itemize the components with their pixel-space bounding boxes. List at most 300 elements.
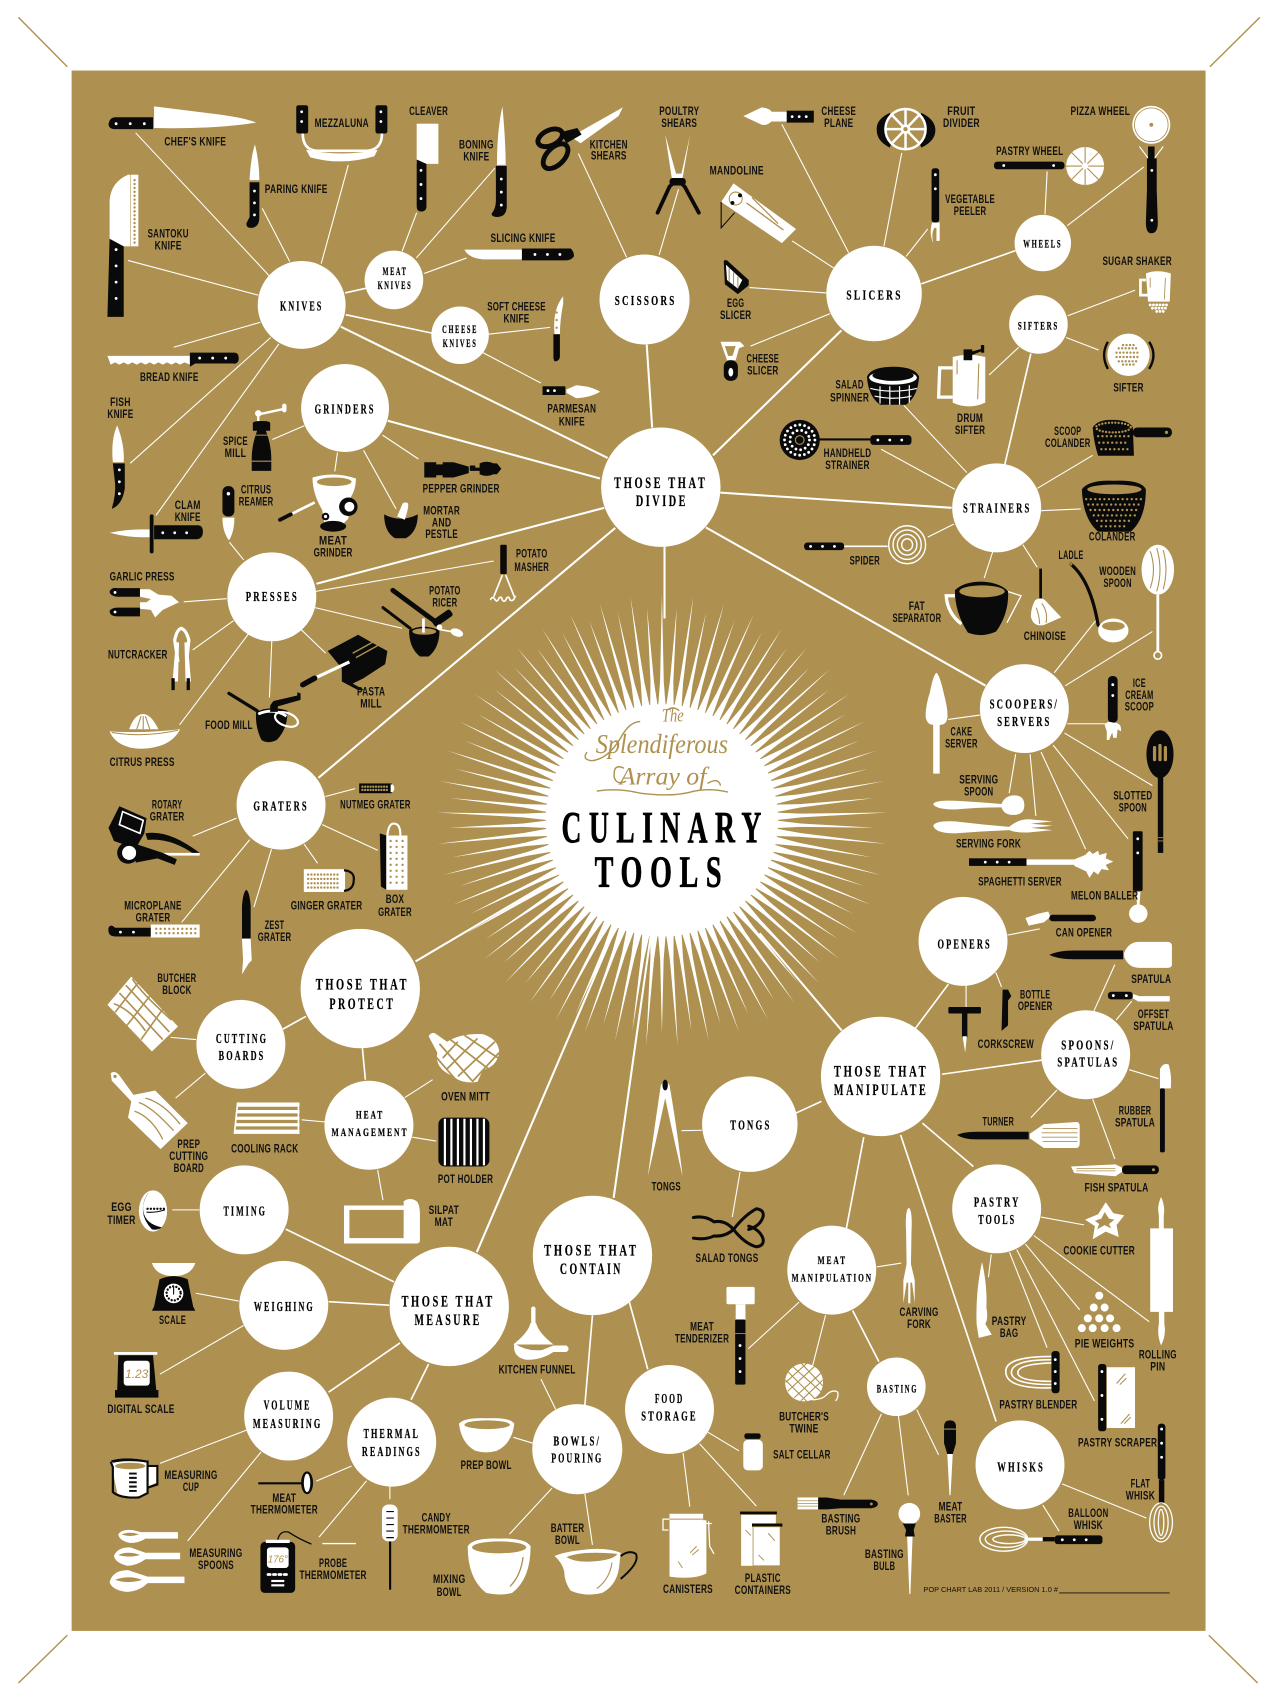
tool: wooden spoon: SPOON — [1104, 577, 1132, 590]
tool: handheld strainer: HANDHELD — [824, 447, 871, 460]
tool: parmesan knife: KNIFE — [559, 415, 585, 428]
tool: pot holder — [438, 1118, 493, 1186]
hub: meat manipulation — [787, 1226, 876, 1315]
tool: scoop colander — [1045, 420, 1172, 456]
tool: citrus reamer: CITRUS — [241, 484, 271, 497]
hub: heat management: MANAGEMENT — [332, 1127, 409, 1139]
tool: turner: TURNER — [983, 1115, 1014, 1128]
tool: rotary grater: ROTARY — [152, 798, 182, 811]
tool: melon baller — [1071, 831, 1147, 923]
tool: cake server: CAKE — [951, 726, 972, 739]
tool: meat thermometer: THERMOMETER — [251, 1504, 318, 1517]
hub: those that measure: MEASURE — [415, 1312, 482, 1329]
hub: basting: BASTING — [877, 1384, 918, 1396]
hub: thermal readings: READINGS — [362, 1444, 422, 1459]
tool: turner — [957, 1115, 1080, 1148]
tool: cookie cutter — [1063, 1202, 1135, 1257]
tool: box grater: GRATER — [378, 906, 412, 919]
tool: butcher block — [107, 972, 197, 1051]
tool: pastry bag: BAG — [1000, 1327, 1018, 1340]
hub: whisks — [976, 1420, 1064, 1509]
tool: nutcracker: NUTCRACKER — [108, 649, 168, 662]
hub: cutting boards: BOARDS — [219, 1048, 265, 1063]
tool: santoku knife: SANTOKU — [148, 228, 189, 241]
tool: fish spatula: FISH SPATULA — [1085, 1181, 1149, 1194]
tool: fish knife — [107, 396, 133, 509]
tool: garlic press: GARLIC PRESS — [110, 571, 175, 584]
tool: citrus press — [110, 714, 180, 769]
tool: pie weights: PIE WEIGHTS — [1075, 1338, 1134, 1351]
tool: offset spatula: OFFSET — [1138, 1008, 1169, 1021]
hub: volume measuring: MEASURING — [253, 1416, 322, 1431]
tool: parmesan knife — [543, 385, 600, 428]
tool: cheese plane: PLANE — [824, 117, 853, 130]
tool: citrus reamer — [222, 484, 274, 540]
title: culinary tools — [562, 802, 769, 897]
hub: graters — [237, 761, 326, 850]
tool: spice mill: MILL — [225, 447, 246, 460]
tool: handheld strainer — [780, 420, 911, 472]
tool: cheese slicer — [721, 342, 779, 381]
tool: prep bowl: PREP BOWL — [461, 1459, 512, 1472]
hub: heat management — [324, 1081, 413, 1170]
tool: spider: SPIDER — [850, 554, 880, 567]
hub: scoopers and servers: SCOOPERS/ — [990, 697, 1059, 712]
tool: butcher block: BLOCK — [162, 984, 192, 997]
tool: cheese slicer: CHEESE — [747, 352, 779, 365]
hub: heat management: HEAT — [356, 1110, 384, 1122]
tool: serving spoon: SPOON — [964, 785, 993, 798]
tool: carving fork: FORK — [907, 1318, 931, 1331]
tool: bread knife: BREAD KNIFE — [140, 371, 199, 384]
hub: presses — [227, 552, 316, 641]
tool: mortar and pestle: AND — [432, 516, 451, 529]
tool: bottle opener: OPENER — [1018, 1000, 1053, 1013]
tool: oven mitt: OVEN MITT — [441, 1090, 490, 1103]
tool: prep cutting board: BOARD — [174, 1162, 204, 1175]
tool: potato masher — [490, 545, 549, 601]
tool: cleaver — [409, 105, 448, 212]
tool: box grater — [378, 824, 412, 919]
tool: rolling pin: PIN — [1150, 1360, 1165, 1373]
title script: the splendiferous array of: Array of — [618, 764, 710, 791]
tool: meat baster: BASTER — [934, 1512, 967, 1525]
title script: the splendiferous array of: The — [662, 706, 684, 726]
tool: meat thermometer — [251, 1471, 318, 1517]
tool: poultry shears: POULTRY — [659, 105, 699, 118]
hub: those that protect: THOSE THAT — [316, 977, 409, 994]
tool: pastry wheel — [994, 145, 1105, 186]
hub: those that measure: THOSE THAT — [401, 1293, 495, 1310]
tool: tongs — [648, 1080, 683, 1193]
tool: citrus press: CITRUS PRESS — [110, 756, 175, 769]
hub: meat knives — [365, 251, 423, 309]
tool: mixing bowl — [433, 1539, 531, 1599]
tool: potato ricer: RICER — [432, 597, 458, 610]
hub: food storage: STORAGE — [641, 1408, 698, 1423]
tool: salad spinner — [830, 367, 919, 405]
tool: measuring cup: MEASURING — [164, 1469, 218, 1482]
central sunburst title — [350, 540, 945, 1133]
tool: salt cellar: SALT CELLAR — [773, 1448, 831, 1461]
hub: meat manipulation: MANIPULATION — [792, 1273, 873, 1285]
tool: candy thermometer: THERMOMETER — [403, 1523, 470, 1536]
tool: silpat mat: MAT — [435, 1216, 453, 1229]
tool: egg timer — [107, 1190, 167, 1232]
tool: plastic containers — [735, 1512, 791, 1597]
tool: mortar and pestle: PESTLE — [425, 528, 458, 541]
hub: pastry tools: PASTRY — [974, 1195, 1021, 1210]
tool: meat thermometer: MEAT — [272, 1492, 296, 1505]
tool: mandoline — [710, 165, 796, 243]
tool: pepper grinder — [423, 462, 501, 496]
tool: rotary grater: GRATER — [150, 810, 185, 823]
tool: paring knife: PARING KNIFE — [265, 183, 328, 196]
hub: cutting boards: CUTTING — [216, 1031, 268, 1046]
tool: boning knife: BONING — [459, 139, 494, 152]
hub: tongs: TONGS — [730, 1118, 772, 1133]
hub: basting — [867, 1357, 926, 1416]
tool: ginger grater — [291, 869, 363, 912]
tool: butcher's twine — [779, 1363, 838, 1435]
tool: carving fork: CARVING — [900, 1306, 939, 1319]
tool: basting bulb — [865, 1503, 920, 1594]
hub: cheese knives: KNIVES — [443, 338, 477, 350]
hub: thermal readings: THERMAL — [364, 1426, 420, 1441]
title: culinary tools: CULINARY — [562, 802, 769, 852]
tool: butcher's twine: BUTCHER'S — [779, 1410, 829, 1423]
secondary branch lines — [283, 251, 1042, 1421]
tool: measuring cup: CUP — [183, 1481, 199, 1494]
tool: nutmeg grater: NUTMEG GRATER — [340, 798, 411, 811]
tool: pastry blender: PASTRY BLENDER — [999, 1398, 1078, 1411]
tool: corkscrew: CORKSCREW — [978, 1038, 1034, 1051]
hub: tongs — [702, 1076, 798, 1172]
hub: those that manipulate: THOSE THAT — [834, 1063, 928, 1080]
tool: vegetable peeler — [931, 168, 995, 243]
tool: carving fork — [900, 1208, 939, 1331]
hub: pastry tools: TOOLS — [978, 1212, 1016, 1227]
tool: soft cheese knife: SOFT CHEESE — [487, 300, 546, 313]
tool: cooling rack: COOLING RACK — [231, 1142, 299, 1155]
tool: rolling pin: ROLLING — [1139, 1349, 1177, 1362]
tool: chef's knife: CHEF'S KNIFE — [164, 135, 226, 148]
tool: zest grater: GRATER — [258, 931, 292, 944]
tool: paring knife — [246, 144, 328, 228]
tool connector lines — [128, 124, 1158, 1545]
tool: kitchen scale — [152, 1263, 195, 1327]
tool: silpat mat: SILPAT — [429, 1204, 459, 1217]
tool: bottle opener — [1002, 988, 1053, 1031]
tool: microplane grater — [108, 899, 200, 938]
tool: probe thermometer — [260, 1532, 367, 1593]
tool: cheese plane — [743, 105, 856, 130]
tool: meat tenderizer: TENDERIZER — [675, 1332, 729, 1345]
hub: spoons and spatulas: SPOONS/ — [1061, 1037, 1115, 1052]
tool: nutcracker — [108, 628, 191, 690]
hub: wheels — [1015, 215, 1071, 271]
tool: santoku knife: KNIFE — [155, 240, 182, 253]
tool: slicing knife: SLICING KNIFE — [490, 232, 556, 245]
sunburst rays — [350, 540, 945, 1133]
tool: rubber spatula: SPATULA — [1115, 1116, 1155, 1129]
tool: fruit divider — [877, 105, 980, 149]
tool: plastic containers: CONTAINERS — [735, 1584, 791, 1597]
main branch lines — [316, 327, 986, 1252]
tool: drum sifter — [939, 345, 985, 437]
tool: meat tenderizer — [675, 1287, 755, 1385]
tool: sugar shaker — [1102, 255, 1172, 311]
tool: zest grater — [242, 890, 292, 974]
tool: measuring spoons — [110, 1530, 243, 1592]
tool: chinoise: CHINOISE — [1024, 630, 1066, 643]
tool: cake server — [926, 673, 978, 774]
tool: kitchen shears — [535, 107, 628, 173]
hub: graters: GRATERS — [253, 799, 309, 814]
hub: food storage: FOOD — [655, 1391, 684, 1406]
tool: pastry scraper: PASTRY SCRAPER — [1078, 1436, 1157, 1449]
hub: meat knives: KNIVES — [378, 280, 412, 292]
tool: slotted spoon: SLOTTED — [1113, 790, 1152, 803]
hub: openers — [919, 897, 1008, 986]
tool: pie weights — [1075, 1292, 1134, 1351]
tool: meat grinder: MEAT — [319, 535, 347, 548]
tool: serving fork — [933, 819, 1053, 850]
tool: pastry bag: PASTRY — [992, 1315, 1027, 1328]
tool: measuring spoons: MEASURING — [189, 1547, 243, 1560]
hub: thermal readings — [347, 1398, 436, 1487]
hub: whisks: WHISKS — [997, 1459, 1045, 1474]
tool: wooden spoon — [1099, 545, 1174, 659]
hub: those that manipulate — [821, 1017, 940, 1136]
hub: timing — [200, 1165, 289, 1254]
tool: potato masher: POTATO — [516, 548, 547, 561]
tool: cookie cutter: COOKIE CUTTER — [1063, 1244, 1135, 1257]
tool: basting brush: BASTING — [821, 1512, 860, 1525]
tool: meat baster — [934, 1420, 967, 1525]
tool: fat separator: FAT — [909, 600, 925, 613]
hub: food storage — [625, 1365, 714, 1454]
tool: salad spinner: SPINNER — [830, 391, 869, 404]
tool: kitchen funnel — [499, 1306, 576, 1377]
hub: sifters — [1009, 295, 1068, 354]
tool: zest grater: ZEST — [265, 919, 284, 932]
tool: plastic containers: PLASTIC — [745, 1572, 781, 1585]
tool: spatula: SPATULA — [1131, 973, 1172, 986]
tool: spice mill — [223, 404, 286, 471]
tool: egg timer: EGG — [111, 1201, 132, 1214]
tool: poultry shears — [658, 105, 699, 213]
tool: boning knife — [459, 106, 507, 217]
tool: colander — [1082, 481, 1146, 543]
tool: basting brush: BRUSH — [826, 1524, 856, 1537]
tool: mandoline: MANDOLINE — [710, 165, 764, 178]
hub: grinders: GRINDERS — [315, 401, 375, 416]
tool: can opener — [1025, 911, 1112, 939]
hub: those that manipulate: MANIPULATE — [834, 1082, 928, 1099]
tool: ginger grater: GINGER GRATER — [291, 899, 363, 912]
tool: probe thermometer: THERMOMETER — [299, 1569, 367, 1582]
hub: cutting boards — [196, 1000, 285, 1089]
tool: cheese plane: CHEESE — [821, 105, 856, 118]
tool: prep cutting board — [111, 1072, 208, 1175]
tool: basting bulb: BASTING — [865, 1548, 904, 1561]
hub: timing: TIMING — [224, 1203, 267, 1218]
hub: scoopers and servers — [980, 664, 1069, 753]
tool: nutmeg grater — [340, 783, 411, 811]
tool: basting brush — [798, 1497, 878, 1537]
tool: salad tongs: SALAD TONGS — [696, 1252, 758, 1265]
tool: cleaver: CLEAVER — [409, 105, 448, 118]
tool: ice cream scoop — [1105, 676, 1154, 740]
hub: those that measure — [390, 1247, 509, 1366]
tool: rolling pin — [1139, 1197, 1177, 1373]
tool: spider — [804, 526, 926, 567]
tool: balloon whisk — [980, 1507, 1108, 1551]
hub: slicers: SLICERS — [846, 287, 903, 302]
tool: measuring spoons: SPOONS — [198, 1559, 234, 1572]
tool: microplane grater: GRATER — [136, 911, 171, 924]
tool: mixing bowl: MIXING — [433, 1573, 466, 1586]
tool: flat whisk — [1126, 1424, 1172, 1542]
hub: wheels: WHEELS — [1023, 238, 1062, 250]
hub: presses: PRESSES — [246, 589, 299, 604]
tool: egg slicer: EGG — [727, 297, 744, 310]
tool: bread knife — [107, 353, 239, 384]
tool: fruit divider: DIVIDER — [943, 117, 980, 130]
tool: batter bowl: BATTER — [551, 1522, 584, 1535]
tool: serving spoon — [933, 773, 1024, 815]
tool: meat grinder — [280, 474, 358, 560]
tool: fruit divider: FRUIT — [947, 105, 976, 118]
credit line: POP CHART LAB 2011 / VERSION 1.0 # — [923, 1585, 1059, 1594]
hub: sifters: SIFTERS — [1018, 320, 1059, 332]
tool: pastry scraper — [1078, 1364, 1157, 1449]
tool: pastry wheel: PASTRY WHEEL — [996, 145, 1063, 158]
tool: drum sifter: DRUM — [957, 412, 983, 425]
tool: salad spinner: SALAD — [836, 378, 864, 391]
hub: bowls and pouring: BOWLS/ — [553, 1433, 601, 1448]
tool: mortar and pestle: MORTAR — [423, 504, 460, 517]
tool: digital scale: DIGITAL SCALE — [107, 1403, 175, 1416]
tool: rubber spatula — [1115, 1064, 1171, 1152]
tool: microplane grater: MICROPLANE — [124, 899, 182, 912]
tool: candy thermometer: CANDY — [422, 1511, 451, 1524]
tool: pasta mill: PASTA — [357, 686, 385, 699]
tool: rotary grater — [109, 798, 200, 865]
hub: meat knives: MEAT — [383, 266, 407, 278]
tool: pastry blender — [999, 1351, 1078, 1411]
hub: volume measuring: VOLUME — [264, 1398, 311, 1413]
tool: butcher block: BUTCHER — [157, 972, 197, 985]
tool: serving spoon: SERVING — [959, 773, 998, 786]
hub: openers: OPENERS — [938, 936, 992, 951]
hub: those that contain: THOSE THAT — [544, 1242, 639, 1259]
tool: pizza wheel — [1070, 105, 1170, 233]
tool: soft cheese knife — [487, 296, 563, 361]
tool: tongs: TONGS — [652, 1180, 681, 1193]
tool: pizza wheel: PIZZA WHEEL — [1070, 105, 1130, 118]
hub: weighing — [239, 1261, 328, 1350]
tool: food mill: FOOD MILL — [205, 719, 253, 732]
tool: silpat mat — [344, 1199, 459, 1244]
tool: flat whisk: FLAT — [1131, 1478, 1150, 1491]
tool: sugar shaker: SUGAR SHAKER — [1102, 255, 1172, 268]
tool: clam knife: KNIFE — [175, 511, 201, 524]
hub: spoons and spatulas: SPATULAS — [1057, 1055, 1119, 1070]
tool: fish knife: FISH — [110, 396, 131, 409]
hub: cheese knives — [431, 307, 489, 364]
hub: knives — [258, 261, 346, 349]
hub: those that protect — [301, 929, 420, 1048]
hub: those that divide: DIVIDE — [636, 493, 688, 510]
tool: drum sifter: SIFTER — [955, 424, 985, 437]
tool: corkscrew — [948, 1007, 1034, 1053]
hub: those that protect: PROTECT — [329, 996, 396, 1013]
tool: digital scale: 1.23 — [125, 1367, 149, 1381]
tool: salad tongs — [693, 1209, 763, 1265]
tool: potato ricer: POTATO — [429, 585, 461, 598]
tool: slotted spoon — [1113, 730, 1174, 853]
tool: meat grinder: GRINDER — [314, 547, 353, 560]
hub: scissors — [600, 254, 690, 345]
tool: prep cutting board: CUTTING — [169, 1150, 208, 1163]
tool: spaghetti server: SPAGHETTI SERVER — [978, 875, 1062, 888]
tool: spatula — [1049, 942, 1172, 986]
tool: cheese slicer: SLICER — [747, 364, 779, 377]
tool: colander: COLANDER — [1089, 530, 1136, 543]
tool: prep bowl — [459, 1418, 514, 1472]
hub: spoons and spatulas — [1041, 1010, 1130, 1099]
tool: fat separator — [892, 582, 1021, 635]
tool: citrus reamer: REAMER — [239, 496, 274, 509]
tool: egg timer: TIMER — [107, 1214, 136, 1227]
tool: batter bowl: BOWL — [555, 1534, 580, 1547]
tool: cake server: SERVER — [945, 738, 978, 751]
tool: pastry bag — [976, 1262, 1027, 1340]
tool: clam knife: CLAM — [175, 499, 201, 512]
hub: knives: KNIVES — [280, 298, 323, 313]
tool: basting bulb: BULB — [874, 1560, 895, 1573]
tool: pot holder: POT HOLDER — [438, 1173, 493, 1186]
tool: candy thermometer — [382, 1504, 470, 1590]
tool: ice cream scoop: CREAM — [1125, 689, 1153, 702]
tool: mezzaluna: MEZZALUNA — [315, 117, 369, 130]
tool: mixing bowl: BOWL — [437, 1586, 462, 1599]
tool: vegetable peeler: VEGETABLE — [945, 193, 995, 206]
tool: sifter: SIFTER — [1113, 382, 1144, 395]
hub: weighing: WEIGHING — [254, 1299, 315, 1314]
tool: fish spatula — [1071, 1164, 1159, 1194]
tool: box grater: BOX — [386, 893, 404, 906]
hub: strainers: STRAINERS — [963, 501, 1031, 516]
tool: handheld strainer: STRAINER — [825, 459, 870, 472]
hub: slicers — [826, 246, 922, 341]
hub: cheese knives: CHEESE — [442, 324, 478, 336]
hub: volume measuring — [244, 1372, 333, 1461]
tool: potato masher: MASHER — [514, 561, 549, 574]
tool: probe thermometer: 176° — [268, 1555, 288, 1566]
tool: bottle opener: BOTTLE — [1020, 988, 1050, 1001]
tool: fat separator: SEPARATOR — [892, 612, 941, 625]
tool: serving fork: SERVING FORK — [956, 837, 1021, 850]
tool: slicing knife — [464, 232, 574, 260]
tool: spice mill: SPICE — [223, 435, 248, 448]
tool: balloon whisk: WHISK — [1074, 1519, 1103, 1532]
tool: soft cheese knife: KNIFE — [503, 312, 530, 325]
tool: slotted spoon: SPOON — [1119, 802, 1147, 815]
hub: bowls and pouring — [532, 1404, 622, 1494]
